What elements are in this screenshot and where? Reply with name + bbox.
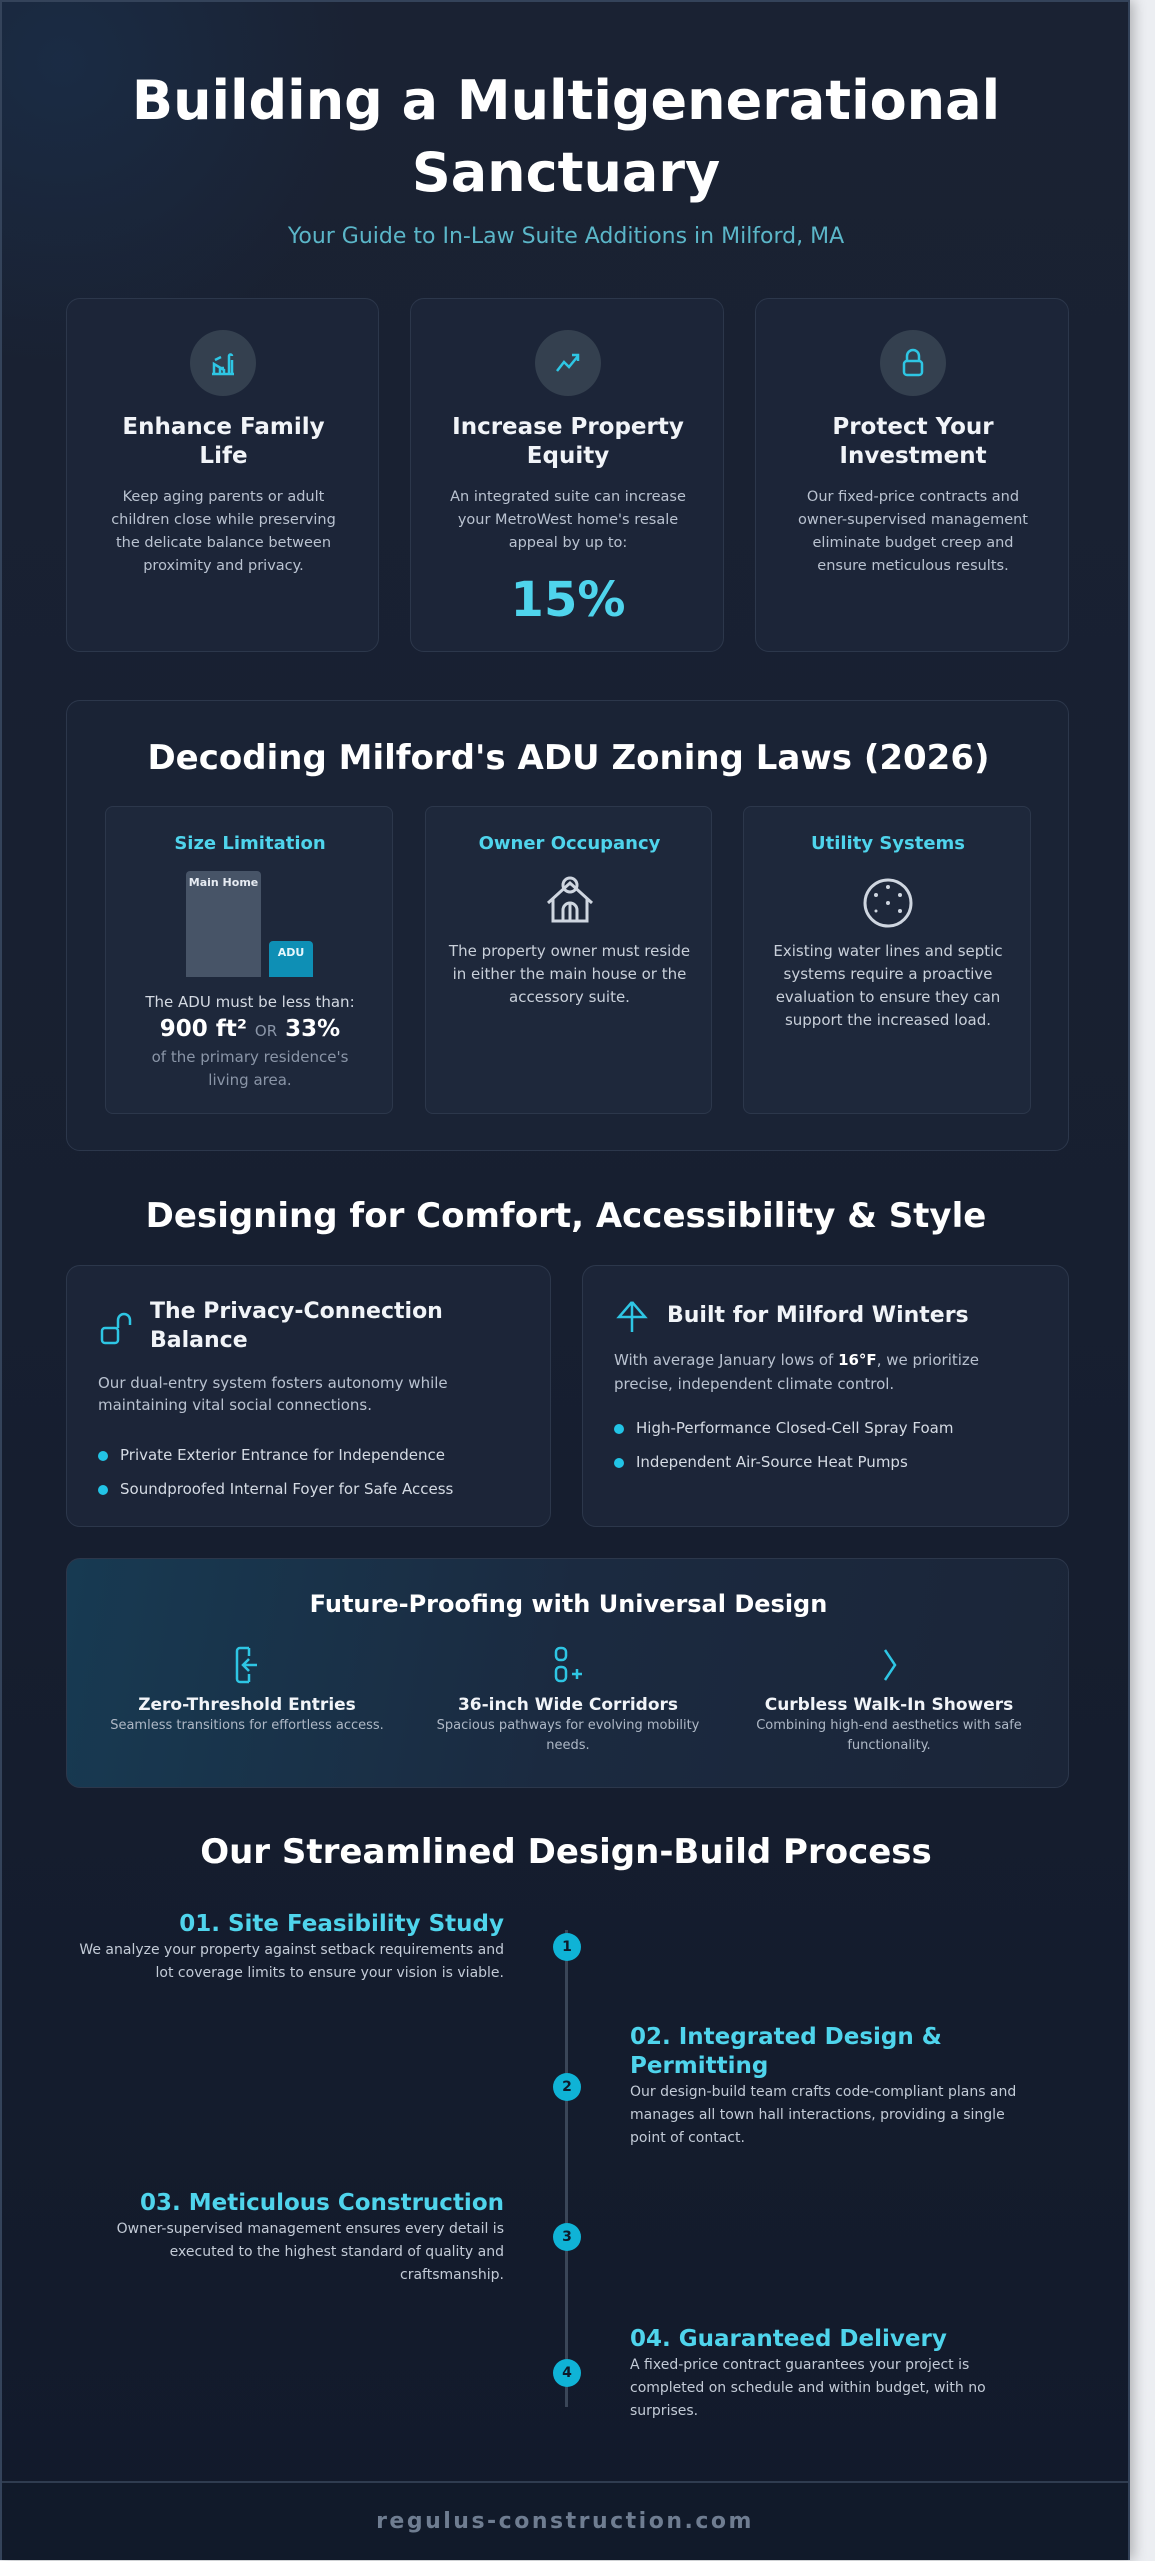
step 3: 03. Meticulous Construction [140,2190,504,2216]
item: corridors: Spacious pathways for evolving mobility needs. [437,1718,699,1753]
panel: universal design [66,1558,1069,1788]
text: size rule: living area. [208,1071,292,1089]
panel: enhance family life [66,298,379,652]
title: Sanctuary [412,141,720,204]
text: Our fixed-price contracts and owner-supervised management eliminate budget creep and ensure meticulous results. [798,489,1028,574]
timeline: 3 [562,2229,572,2245]
heading: Decoding Milford's ADU Zoning Laws (2026) [147,738,990,778]
step 4: 04. Guaranteed Delivery [630,2326,947,2352]
step 3: Owner-supervised management ensures every detail is executed to the highest standard of quality and craftsmanship. [117,2221,504,2283]
text: size rule: The ADU must be less than: [145,993,355,1011]
bar chart: main home vs adu: Main Home [189,876,258,889]
step 4 [630,2326,986,2419]
heading [122,414,325,469]
step 1: 01. Site Feasibility Study [179,1911,504,1937]
item: zero-threshold: Seamless transitions for effortless access. [110,1718,384,1733]
subtitle: Your Guide to In-Law Suite Additions in Milford, MA [288,224,844,249]
text: An integrated suite can increase your MetroWest home's resale appeal by up to: [450,489,686,551]
text: size rule: of the primary residence's [152,1048,348,1066]
text: Our dual-entry system fosters autonomy while maintaining vital social connections. [98,1374,448,1414]
heading: Enhance Family [122,414,325,440]
bar chart: main home vs adu [186,871,313,977]
panel: milford winters [582,1265,1069,1527]
panel: zoning laws [66,700,1069,1151]
item: showers [756,1649,1022,1753]
step 2: 02. Integrated Design & [630,2024,942,2050]
timeline: 2 [562,2079,572,2095]
text: With average January lows of 16°F, we prioritize precise, independent climate control. [614,1351,979,1393]
step 3 [117,2190,504,2283]
step 2: Permitting [630,2053,768,2079]
text: The property owner must reside in either the main house or the accessory suite. [449,942,690,1006]
heading: Balance [150,1328,248,1353]
panel: increase property equity [410,298,724,652]
heading: Built for Milford Winters [667,1303,969,1328]
item: showers: Combining high-end aesthetics with safe functionality. [756,1718,1022,1753]
card: owner occupancy [425,806,712,1114]
step 1: We analyze your property against setback requirements and lot coverage limits to ensure your vision is viable. [79,1942,504,1981]
text: size rule: 900 ft² OR 33% [160,1016,340,1042]
footer: regulus-construction.com [376,2509,754,2534]
icon: trend [535,330,601,396]
icon: snow/compass [616,1301,648,1332]
item: zero-threshold [110,1646,384,1733]
icon: family chart [190,330,256,396]
step 4: A fixed-price contract guarantees your project is completed on schedule and within budget, with no surprises. [630,2357,986,2419]
heading: Investment [839,443,987,469]
heading: Size Limitation [174,833,326,854]
step 2 [630,2024,1016,2146]
timeline [79,1911,1016,2419]
timeline: 1 [562,1939,572,1955]
footer [2,2481,1128,2560]
timeline: 4 [562,2365,572,2381]
heading [452,414,684,469]
icon: unlock [100,1312,132,1344]
item: corridors: 36-inch Wide Corridors [458,1695,678,1715]
heading: Life [199,443,248,469]
title [132,69,1000,204]
bullet list: Independent Air-Source Heat Pumps [636,1453,908,1471]
heading [150,1299,443,1353]
item: zero-threshold: Zero-Threshold Entries [138,1695,356,1715]
bullet list: Private Exterior Entrance for Independence [120,1446,445,1464]
heading: Protect Your [832,414,994,440]
icon: gauge [864,878,912,928]
title: Building a Multigenerational [132,69,1000,132]
bullet list: Soundproofed Internal Foyer for Safe Access [120,1480,453,1498]
card: utility systems [743,806,1031,1114]
heading: The Privacy-Connection [150,1299,443,1324]
icon: lock [880,330,946,396]
heading: Owner Occupancy [479,833,660,854]
heading: Equity [527,443,609,469]
text: Existing water lines and septic systems require a proactive evaluation to ensure they can support the increased load. [773,942,1003,1029]
step 2: Our design-build team crafts code-compliant plans and manages all town hall interactions, providing a single point of contact. [630,2084,1016,2146]
bullet list [98,1446,453,1498]
heading: designing: Designing for Comfort, Accessibility & Style [146,1196,986,1236]
bar chart: main home vs adu: ADU [278,946,304,959]
heading: Increase Property [452,414,684,440]
item: showers: Curbless Walk-In Showers [765,1695,1013,1715]
card: size limitation [105,806,393,1114]
item: corridors [437,1646,699,1753]
text: size rule [145,993,355,1089]
heading: process: Our Streamlined Design-Build Process [200,1832,932,1872]
icon: house [547,876,593,922]
heading: Future-Proofing with Universal Design [310,1590,827,1618]
bullet list [614,1419,953,1471]
text: Keep aging parents or adult children close while preserving the delicate balance between proximity and privacy. [111,489,336,574]
panel: privacy-connection [66,1265,551,1527]
step 1 [79,1911,504,1981]
bullet list: High-Performance Closed-Cell Spray Foam [636,1419,953,1437]
stat 15%: 15% [511,572,625,628]
heading [832,414,994,469]
heading: Utility Systems [811,833,965,854]
panel: protect investment [755,298,1069,652]
